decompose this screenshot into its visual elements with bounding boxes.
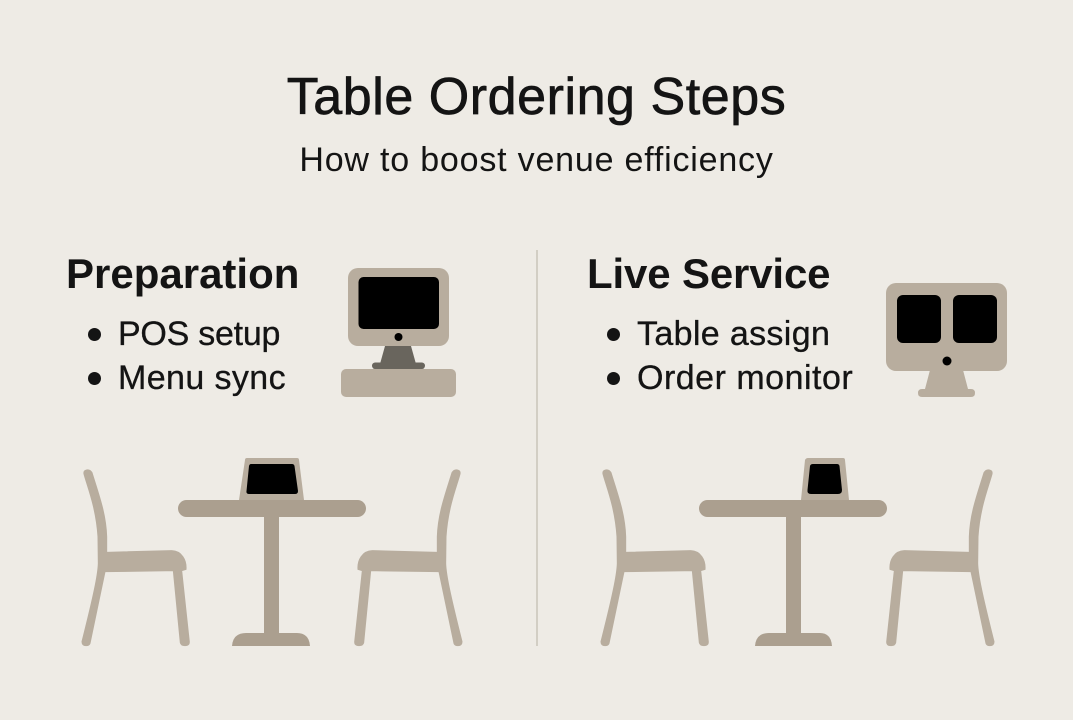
list: live service tasks: Order monitor: [637, 359, 853, 397]
chair: left: [601, 470, 708, 646]
subtitle: How to boost venue efficiency: [299, 141, 774, 179]
tablet: [801, 458, 849, 500]
list: live service tasks: Table assign: [637, 315, 830, 353]
title: Table Ordering Steps: [287, 68, 786, 126]
chair: left: [82, 470, 189, 646]
list: preparation tasks: Menu sync: [118, 359, 286, 397]
heading: Preparation: Preparation: [66, 250, 299, 297]
table: [178, 500, 366, 646]
list: live service tasks: [607, 315, 853, 397]
table: [699, 500, 887, 646]
scene: right table and chairs: [601, 458, 994, 646]
icon: dual-screen monitor: [886, 283, 1007, 397]
scene: left table and chairs: [82, 458, 462, 646]
heading: Live Service: Live Service: [587, 250, 830, 297]
icon: POS monitor with keyboard: [341, 268, 456, 397]
chair: right: [355, 470, 462, 646]
chair: right: [887, 470, 994, 646]
list: preparation tasks: [88, 315, 286, 397]
tablet: [239, 458, 304, 500]
list: preparation tasks: POS setup: [118, 315, 280, 353]
